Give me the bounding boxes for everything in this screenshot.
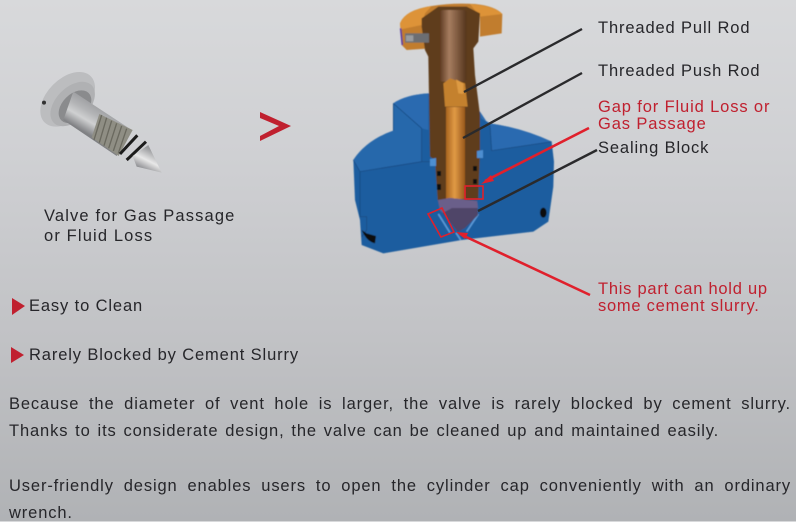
sealing block (438, 198, 478, 232)
label: threaded push rod: Threaded Push Rod (598, 62, 760, 80)
paragraph: vent hole: Because the diameter of vent hole is larger, the valve is rarely blocked by cement slurry. (9, 395, 791, 413)
brown housing and orange cap (400, 4, 502, 200)
leader: threaded push rod (463, 73, 582, 138)
caption: valve: Valve for Gas Passage (44, 207, 235, 225)
label: sealing block: Sealing Block (598, 139, 709, 157)
slurry highlight box (428, 208, 454, 237)
o-ring seals (362, 208, 547, 243)
caption: valve: or Fluid Loss (44, 227, 153, 245)
icon: red chevron arrow (260, 112, 291, 141)
bullet: rarely blocked (11, 347, 24, 363)
leader: slurry arrow (456, 232, 590, 295)
feature: easy to clean: Easy to Clean (29, 297, 143, 315)
label: cement slurry note (598, 280, 768, 315)
paragraph: vent hole (9, 395, 791, 440)
label: cement slurry note: some cement slurry. (598, 297, 760, 315)
paragraph: vent hole: Thanks to its considerate design, the valve can be cleaned up and maintained easily. (9, 422, 719, 440)
small blue fittings (430, 150, 483, 166)
label: gap for fluid loss (598, 98, 770, 133)
threaded push rod (446, 107, 465, 199)
bullet: easy to clean (12, 298, 25, 315)
cavity slits (438, 214, 478, 240)
icon: valve photo (30, 62, 162, 173)
label: gap for fluid loss: Gap for Fluid Loss or (598, 98, 770, 116)
label: cement slurry note: This part can hold up (598, 280, 768, 298)
paragraph: user-friendly design (9, 477, 791, 522)
paragraph: user-friendly design: wrench. (9, 504, 73, 522)
valve cross-section diagram (353, 4, 554, 253)
small seals (437, 166, 477, 190)
gap highlight box (465, 186, 483, 199)
paragraph: user-friendly design: User-friendly design enables users to open the cylinder cap conveniently with an ordinary (9, 477, 791, 495)
caption: valve (44, 207, 235, 245)
feature: rarely blocked: Rarely Blocked by Cement Slurry (29, 346, 299, 364)
label: gap for fluid loss: Gas Passage (598, 115, 707, 133)
leader: gap arrow (481, 128, 589, 184)
label: threaded pull rod: Threaded Pull Rod (598, 19, 750, 37)
leader: threaded pull rod (464, 29, 582, 92)
threaded pull rod (443, 78, 468, 107)
blue valve body (353, 93, 554, 253)
leader: sealing block (478, 150, 597, 211)
